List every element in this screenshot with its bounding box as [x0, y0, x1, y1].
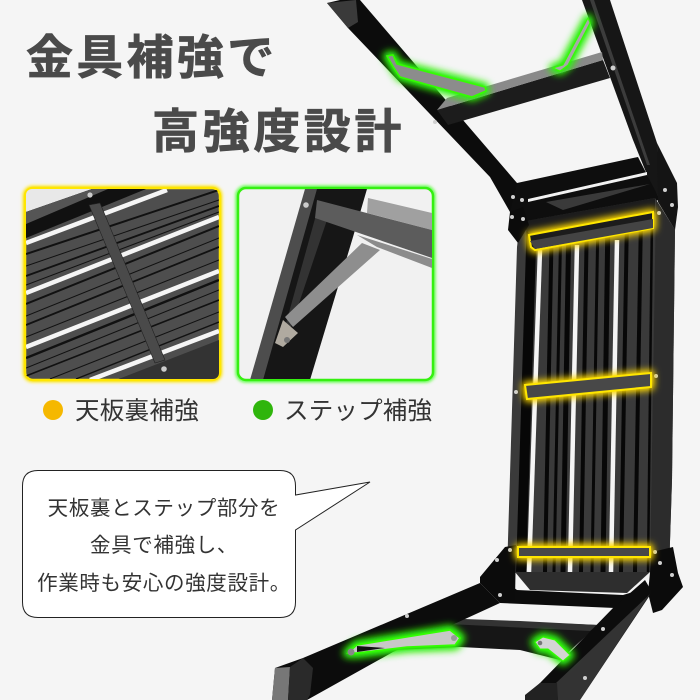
title line 1: 金具補強で	[26, 31, 278, 84]
metal strap	[89, 203, 165, 363]
upper crossbar	[367, 198, 432, 230]
lower panel plate	[515, 572, 650, 593]
upper crossbar	[437, 60, 610, 125]
bolts	[284, 337, 290, 343]
frame bar	[116, 340, 219, 380]
green highlight: upper left bracket	[387, 55, 486, 97]
callout text	[37, 497, 291, 595]
lower crossbar strip	[357, 235, 432, 268]
yellow highlight: bottom step bar	[518, 547, 650, 557]
legend: top panel reinforcement: 天板裏補強	[75, 397, 199, 425]
back rail	[258, 189, 367, 380]
callout text: 作業時も安心の強度設計。	[37, 572, 291, 595]
left hinge bracket	[480, 545, 516, 603]
inner rail shade	[286, 218, 326, 327]
green highlight: lower right bracket	[535, 637, 570, 661]
bolts	[405, 66, 674, 680]
panel: underside reinforcement photo	[24, 188, 220, 380]
dark ribs	[26, 190, 219, 379]
lower crossbar	[393, 617, 598, 660]
front rail	[250, 189, 317, 380]
right hinge bracket	[648, 547, 683, 613]
brace plate	[275, 320, 298, 347]
upper right rail	[582, 0, 660, 200]
upper left rail	[327, 0, 530, 243]
white slots	[529, 240, 617, 572]
right rail shade	[650, 200, 675, 569]
title	[26, 31, 405, 158]
top step frame	[510, 157, 660, 222]
callout text: 金具で補強し、	[90, 534, 238, 557]
lower right rail	[525, 580, 652, 700]
panel ribs	[521, 215, 652, 572]
callout text: 天板裏とステップ部分を	[48, 497, 280, 520]
panel: step reinforcement photo	[238, 188, 434, 380]
lower left rail	[272, 583, 500, 700]
upper hinge plate	[657, 143, 678, 230]
legend: step reinforcement: ステップ補強	[284, 397, 432, 425]
ladder illustration	[272, 0, 683, 700]
bolts	[87, 192, 93, 198]
green highlight: upper right bracket	[553, 18, 590, 71]
callout	[22, 470, 370, 618]
yellow highlight: top step bar	[529, 212, 653, 250]
yellow highlight: middle step bar	[525, 373, 651, 399]
green highlight: lower left bracket	[348, 630, 460, 656]
panel top shade	[520, 198, 655, 235]
lower panel bar	[500, 585, 640, 608]
white slots	[26, 190, 219, 380]
metal brace	[285, 243, 380, 327]
main panel	[507, 198, 675, 572]
title line 2: 高強度設計	[152, 105, 405, 158]
